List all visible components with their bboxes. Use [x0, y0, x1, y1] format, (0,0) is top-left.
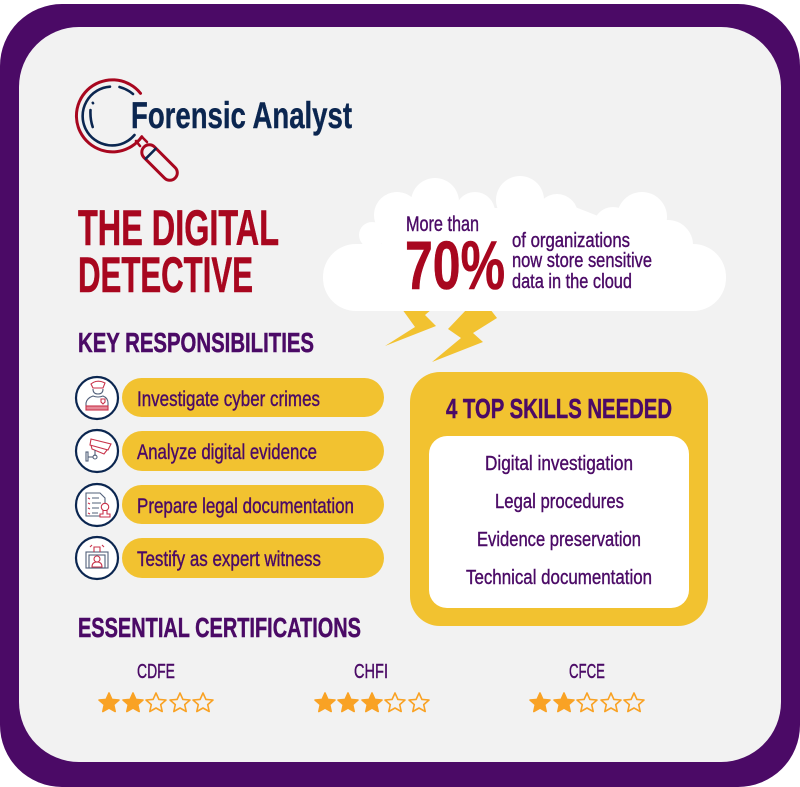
cloud statistic text: data in the cloud	[512, 271, 632, 293]
cloud	[323, 176, 726, 311]
heading: The Digital Detective: THE DIGITAL	[78, 200, 279, 256]
pill: analyze	[122, 431, 384, 471]
pill: testify	[122, 538, 384, 578]
certification: CFCE: CFCE	[569, 661, 605, 683]
icon: magnifying glass	[76, 80, 180, 183]
certification: CDFE: CDFE	[137, 661, 175, 683]
icon: legal document	[76, 484, 118, 526]
cloud statistic text	[405, 213, 652, 304]
heading: key responsibilities: KEY RESPONSIBILITIES	[78, 327, 314, 358]
skills list	[429, 436, 689, 608]
icon: witness badge	[76, 537, 118, 579]
title: Forensic Analyst: Forensic Analyst	[131, 95, 352, 136]
pill: investigate: Investigate cyber crimes	[137, 388, 320, 411]
certification: CDFE	[99, 661, 213, 712]
cloud statistic text: now store sensitive	[512, 250, 652, 272]
pill: testify: Testify as expert witness	[137, 548, 321, 571]
cloud statistic text: More than	[406, 213, 479, 236]
certification: CHFI	[315, 661, 429, 712]
pill: investigate	[122, 378, 384, 417]
panel: top skills	[410, 372, 708, 626]
pill: prepare	[122, 485, 384, 524]
skills list: Technical documentation	[466, 566, 652, 589]
cloud statistic text: 70%	[405, 227, 505, 304]
cloud statistic text: of organizations	[512, 230, 630, 252]
skills list: Legal procedures	[495, 490, 624, 513]
heading: The Digital Detective	[78, 200, 279, 303]
heading: The Digital Detective: DETECTIVE	[78, 247, 253, 303]
heading: essential certifications: ESSENTIAL CERTIFICATIONS	[78, 612, 361, 643]
skills list: Evidence preservation	[477, 528, 641, 551]
certification: CFCE	[530, 661, 644, 712]
icon: investigator	[76, 377, 118, 419]
heading: top skills: 4 TOP SKILLS NEEDED	[446, 393, 672, 424]
icon: security camera	[76, 430, 118, 472]
skills list: Digital investigation	[485, 452, 633, 475]
pill: prepare: Prepare legal documentation	[137, 495, 354, 518]
pill: analyze: Analyze digital evidence	[137, 441, 317, 464]
certification: CHFI: CHFI	[354, 661, 388, 683]
lightning bolts	[385, 309, 497, 362]
